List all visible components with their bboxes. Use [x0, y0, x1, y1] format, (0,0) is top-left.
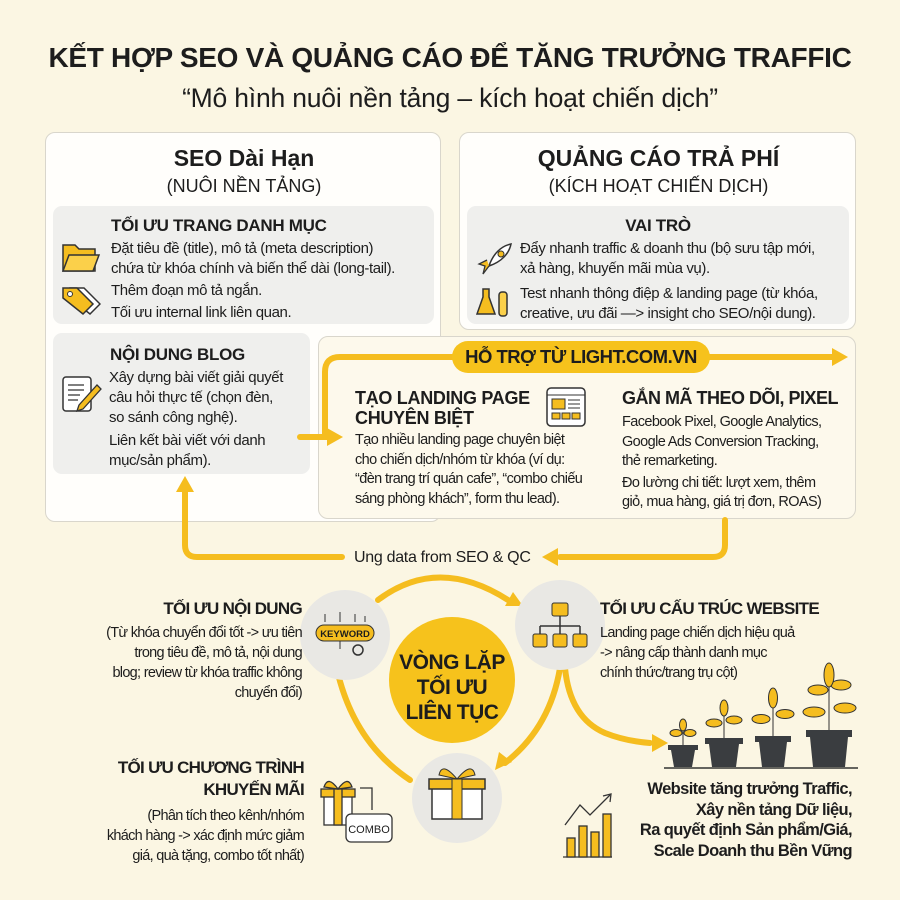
icon: gift combo	[321, 781, 392, 842]
heading: quang cao: QUẢNG CÁO TRẢ PHÍ	[538, 145, 779, 171]
pill: ho tro tu light: HỖ TRỢ TỪ LIGHT.COM.VN	[465, 346, 697, 367]
box heading: NỘI DUNG BLOG	[110, 345, 245, 364]
block: landing page	[355, 387, 586, 506]
text: blog: Xây dựng bài viết giải quyết	[109, 369, 283, 386]
text: pixel: Đo lường chi tiết: lượt xem, thêm	[622, 474, 816, 490]
text: toi uu noi dung	[106, 598, 302, 701]
icon: gift circle	[412, 753, 502, 843]
text: blog: câu hỏi thực tế (chọn đèn,	[109, 389, 273, 406]
text: ket qua: Scale Doanh thu Bền Vững	[654, 842, 852, 860]
text: pixel: Google Ads Conversion Tracking,	[622, 434, 819, 450]
text: pixel: thẻ remarketing.	[622, 453, 717, 469]
text: ket qua	[640, 780, 852, 860]
text: landing page: sáng phòng khách”, form thu lead).	[355, 490, 560, 506]
icon: document pencil	[62, 376, 102, 412]
label: ung data: Ung data from SEO & QC	[354, 549, 531, 566]
text: toi uu noi dung: trong tiêu đề, mô tả, nội dung	[134, 645, 302, 661]
center circle: LIÊN TỤC	[406, 700, 499, 724]
box: toi uu trang danh muc	[53, 206, 434, 324]
heading: landing page: CHUYÊN BIỆT	[355, 408, 474, 428]
text: blog: mục/sản phẩm).	[109, 452, 211, 469]
text: pixel: Facebook Pixel, Google Analytics,	[622, 414, 821, 430]
text: khuyen mai: KHUYẾN MÃI	[203, 780, 304, 799]
block: pixel	[622, 387, 838, 510]
loop arrows	[335, 578, 650, 780]
text: vai tro: Đẩy nhanh traffic & doanh thu (bộ sưu tập mới,	[520, 240, 815, 257]
text: blog: so sánh công nghệ).	[109, 409, 237, 426]
text: toi uu noi dung: blog; review từ khóa traffic không	[112, 665, 302, 681]
icon: bar chart	[563, 794, 612, 857]
icon: keyword circle	[300, 590, 390, 680]
text: landing page	[355, 432, 582, 506]
panel: SEO	[45, 132, 441, 522]
icon: gift combo: COMBO	[348, 824, 390, 836]
text: danh muc: Đặt tiêu đề (title), mô tả (meta description)	[111, 240, 373, 257]
text: blog: Liên kết bài viết với danh	[109, 432, 265, 449]
box heading: TỐI ƯU TRANG DANH MỤC	[111, 216, 327, 235]
text: landing page: “đèn trang trí quán cafe”, “combo chiếu	[355, 471, 582, 487]
subheading: SEO: (NUÔI NỀN TẢNG)	[167, 176, 321, 196]
center circle	[389, 617, 515, 743]
icon: keyword circle: KEYWORD	[320, 629, 370, 640]
text: ket qua: Xây nền tảng Dữ liệu,	[696, 800, 852, 818]
text: toi uu cau truc: Landing page chiến dịch hiệu quả	[600, 625, 794, 641]
text: khuyen mai	[107, 758, 304, 864]
icon: structure circle	[515, 580, 605, 670]
text: khuyen mai: khách hàng -> xác định mức giảm	[107, 828, 304, 844]
text: vai tro	[520, 240, 818, 322]
text: vai tro: creative, ưu đãi —> insight cho SEO/nội dung).	[520, 305, 816, 322]
pill: ho tro tu light	[452, 341, 710, 373]
text: khuyen mai: giá, quà tặng, combo tốt nhất)	[132, 848, 304, 864]
text: danh muc: Thêm đoạn mô tả ngắn.	[111, 282, 262, 299]
heading: landing page	[355, 388, 530, 428]
text: khuyen mai: TỐI ƯU CHƯƠNG TRÌNH	[118, 758, 304, 777]
center circle: TỐI ƯU	[417, 675, 487, 699]
text: toi uu cau truc: TỐI ƯU CẤU TRÚC WEBSITE	[600, 599, 819, 618]
text: ket qua: Website tăng trưởng Traffic,	[647, 780, 852, 798]
text: vai tro: Test nhanh thông điệp & landing page (từ khóa,	[520, 285, 818, 302]
text: ket qua: Ra quyết định Sản phẩm/Giá,	[640, 821, 852, 839]
text: landing page: Tạo nhiều landing page chuyên biệt	[355, 432, 564, 448]
heading: landing page: TẠO LANDING PAGE	[355, 388, 530, 408]
text: vai tro: xả hàng, khuyến mãi mùa vụ).	[520, 260, 710, 277]
text: danh muc: chứa từ khóa chính và biến thể dài (long-tail).	[111, 260, 395, 277]
icon: flask	[476, 288, 508, 317]
text: danh muc: Tối ưu internal link liên quan.	[111, 304, 291, 321]
text: toi uu cau truc: -> nâng cấp thành danh mục	[600, 645, 767, 661]
text: toi uu noi dung: chuyển đổi)	[235, 685, 302, 701]
subheading: quang cao: (KÍCH HOẠT CHIẾN DỊCH)	[549, 176, 768, 196]
text: pixel	[622, 414, 821, 510]
icon: webpage	[546, 387, 586, 427]
text: pixel: giỏ, mua hàng, giá trị đơn, ROAS)	[622, 494, 821, 510]
center circle: VÒNG LẶP	[399, 650, 505, 674]
icon: rocket	[477, 243, 512, 274]
panel: quang cao	[459, 132, 856, 330]
icon: plants	[664, 663, 858, 768]
icon: folder	[62, 244, 100, 272]
panel: ho tro	[318, 336, 856, 519]
text: toi uu cau truc	[600, 599, 820, 681]
text: toi uu cau truc: chính thức/trang trụ cột)	[600, 665, 737, 681]
heading: SEO: SEO Dài Hạn	[174, 145, 314, 171]
text: landing page: cho chiến dịch/nhóm từ khóa (ví dụ:	[355, 452, 565, 468]
subtitle: “Mô hình nuôi nền tảng – kích hoạt chiến dịch”	[182, 83, 718, 113]
title: KẾT HỢP SEO VÀ QUẢNG CÁO ĐỂ TĂNG TRƯỞNG TRAFFIC	[48, 42, 852, 73]
text: toi uu noi dung: TỐI ƯU NỘI DUNG	[163, 599, 302, 618]
box: vai tro	[467, 206, 849, 324]
box: noi dung blog	[53, 333, 310, 474]
text: khuyen mai: (Phân tích theo kênh/nhóm	[147, 808, 304, 824]
icon: tag	[62, 287, 101, 315]
text: danh muc	[111, 240, 395, 321]
box heading: VAI TRÒ	[625, 216, 691, 235]
text: blog	[109, 369, 284, 469]
heading: pixel: GẮN MÃ THEO DÕI, PIXEL	[622, 388, 838, 408]
text: toi uu noi dung: (Từ khóa chuyển đổi tốt -> ưu tiên	[106, 625, 302, 641]
